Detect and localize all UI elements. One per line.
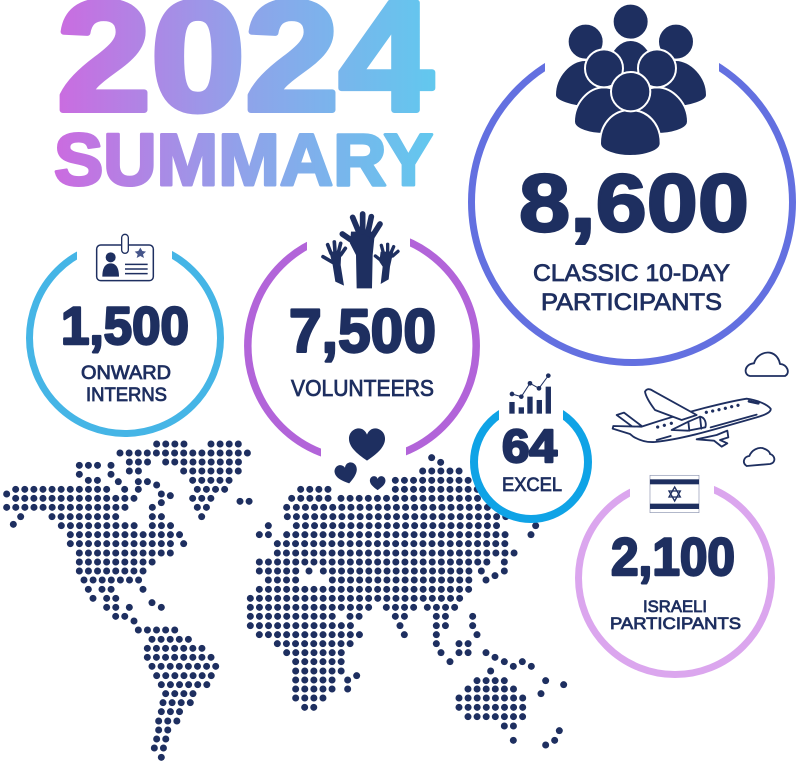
panel: volunteers xyxy=(248,214,476,470)
panel: classic participants xyxy=(472,4,792,363)
panel: onward interns xyxy=(30,232,220,434)
icon: group of people xyxy=(555,4,707,156)
label: classic 10-day participants: PARTICIPANTS xyxy=(541,289,722,316)
icon: airplane and clouds xyxy=(613,353,788,466)
number: 7,500: 7,500 xyxy=(289,297,436,365)
label: volunteers: VOLUNTEERS xyxy=(291,375,434,401)
label: excel: EXCEL xyxy=(502,474,562,496)
panel: israeli participants xyxy=(578,470,772,674)
number: 8,600: 8,600 xyxy=(519,158,749,249)
world map: americas xyxy=(7,444,249,757)
label: israeli participants: ISRAELI xyxy=(643,597,707,616)
title: SUMMARY xyxy=(54,120,433,201)
label: onward interns: INTERNS xyxy=(86,385,167,406)
panel: excel xyxy=(474,373,588,519)
icon: cloud lower xyxy=(744,448,774,466)
icon: raised hands xyxy=(323,214,398,288)
label: classic 10-day participants xyxy=(533,260,730,316)
airplane xyxy=(613,389,771,447)
label: israeli participants: PARTICIPANTS xyxy=(610,614,741,633)
icon: hearts xyxy=(333,428,385,490)
label: onward interns xyxy=(81,363,171,406)
number: 64: 64 xyxy=(502,420,557,472)
label: classic 10-day participants: CLASSIC 10-DAY xyxy=(533,260,730,287)
icon: id badge xyxy=(97,234,153,281)
icon: cloud upper xyxy=(746,353,788,376)
number: 2,100: 2,100 xyxy=(611,528,735,587)
label: israeli participants xyxy=(610,597,741,633)
world map: europe, africa, asia, australia xyxy=(250,458,564,745)
label: onward interns: ONWARD xyxy=(81,363,171,384)
number: 1,500: 1,500 xyxy=(61,297,189,356)
icon: bar chart with trend line xyxy=(509,373,551,414)
title xyxy=(54,0,433,201)
icon: israeli flag xyxy=(650,475,699,513)
